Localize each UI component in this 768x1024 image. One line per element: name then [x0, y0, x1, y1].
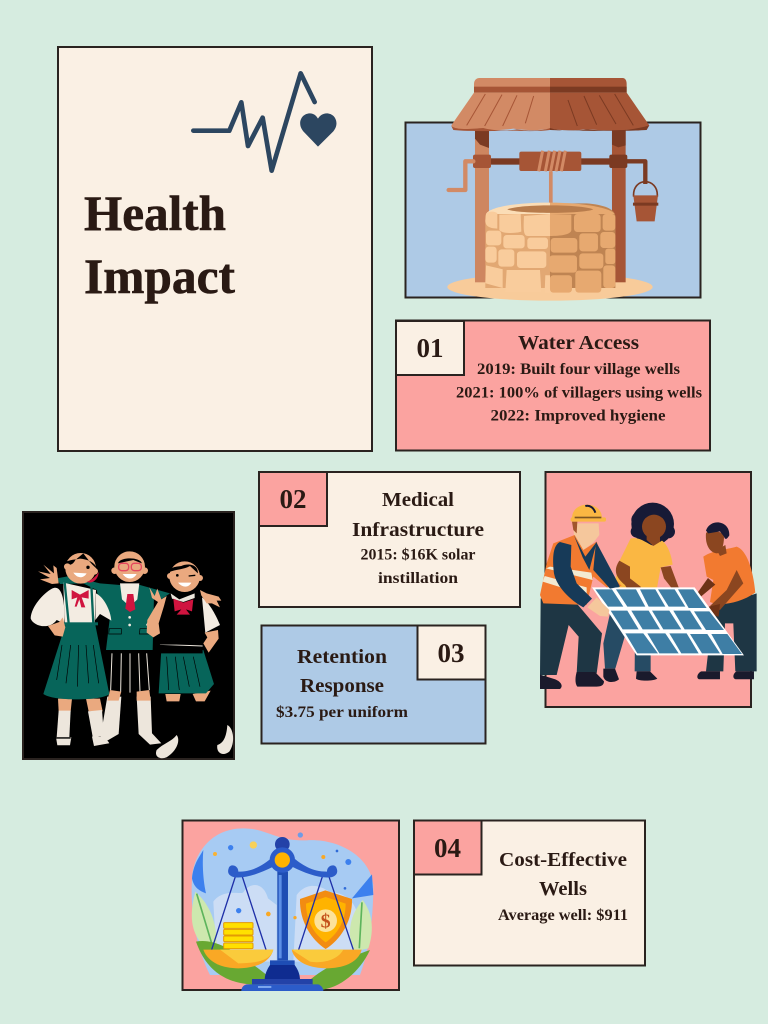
heading: Medical Infrastructure: Infrastructure: [352, 519, 484, 541]
panel: students illustration: [23, 512, 234, 759]
heading: Water Access: Water Access: [518, 332, 639, 354]
heading: Retention Response: Response: [300, 675, 384, 697]
panel: scale illustration: [182, 820, 399, 991]
worker right: [697, 522, 757, 679]
icon: water well: [447, 78, 658, 301]
number box 01: [396, 321, 464, 375]
heading: Cost-Effective Wells: [499, 849, 627, 900]
number box 03: 03: [438, 638, 464, 668]
heading: Retention Response: [297, 646, 388, 697]
panel: 01 Water Access: [396, 320, 710, 450]
number box 02: 02: [280, 484, 306, 514]
number box 02: [259, 472, 327, 526]
worker middle: [603, 503, 683, 682]
worker left: [540, 505, 622, 689]
panel: solar workers illustration: [540, 472, 757, 707]
left student: [31, 553, 109, 746]
heading: Medical Infrastructure: [352, 489, 484, 541]
icon: heartbeat and heart: [193, 73, 336, 171]
text: average well cost: Average well: $911: [498, 907, 628, 924]
heading: Retention Response: Retention: [297, 646, 388, 668]
number box 04: 04: [434, 833, 461, 863]
number box 03: [418, 626, 486, 680]
number box 04: [414, 820, 482, 874]
panel: title: [58, 47, 372, 451]
icon: three workers carrying a solar panel: [540, 503, 757, 689]
icon: three students in uniform: [31, 551, 233, 758]
text: uniform cost: $3.75 per uniform: [276, 704, 409, 721]
text: solar installation: [360, 546, 476, 587]
text: solar installation: 2015: $16K solar: [360, 546, 476, 564]
text: solar installation: instillation: [378, 570, 458, 587]
middle student: [57, 551, 170, 745]
text: water timeline: 2021: 100% of villagers using wells: [456, 384, 702, 402]
heading: Health Impact: Health: [84, 186, 226, 241]
text: water timeline: [456, 361, 702, 424]
solar panel: [592, 587, 744, 655]
heading: Health Impact: Impact: [84, 249, 236, 304]
panel: 03 Retention Response: [262, 626, 486, 744]
heading: Cost-Effective Wells: Wells: [539, 878, 587, 900]
panel: well illustration: [406, 78, 700, 301]
panel: 02 Medical Infrastructure: [259, 472, 520, 607]
text: water timeline: 2019: Built four village wells: [477, 361, 680, 378]
icon: balance scale with coins and shield: $: [321, 910, 331, 932]
text: water timeline: 2022: Improved hygiene: [490, 408, 666, 424]
icon: balance scale with coins and shield: [192, 828, 373, 991]
right student: [146, 561, 233, 758]
heading: Medical Infrastructure: Medical: [382, 489, 454, 511]
heading: Cost-Effective Wells: Cost-Effective: [499, 849, 627, 871]
panel: 04 Cost-Effective Wells: [414, 820, 645, 966]
heading: Health Impact: [84, 186, 236, 304]
number box 01: 01: [416, 333, 444, 363]
